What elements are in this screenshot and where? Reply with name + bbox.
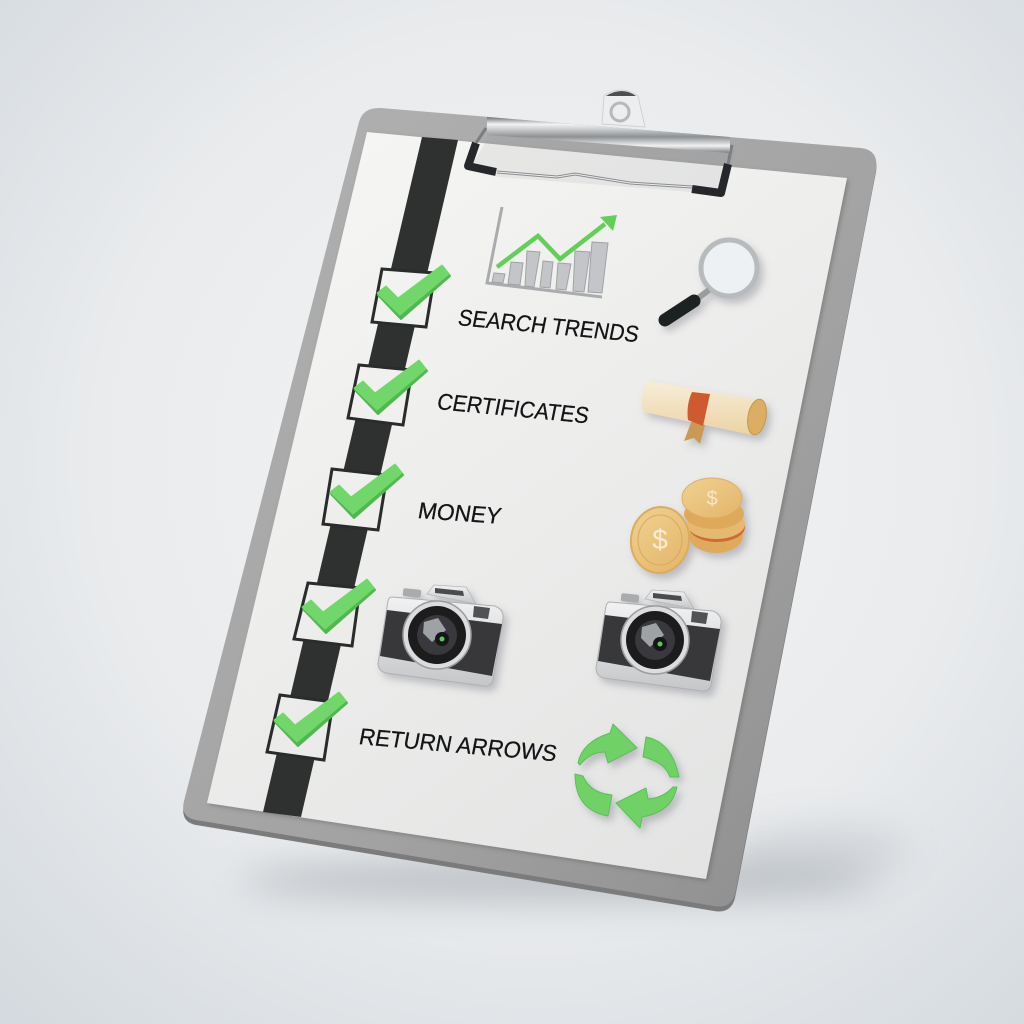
label: return arrows: RETURN ARROWS	[357, 723, 559, 766]
clip ring	[602, 90, 645, 127]
label: money: MONEY	[416, 497, 503, 529]
clip top bar	[487, 117, 730, 153]
row 1	[372, 265, 641, 347]
checkbox	[294, 583, 360, 646]
label: certificates: CERTIFICATES	[435, 388, 591, 428]
paper sheet	[207, 132, 847, 879]
checkbox	[267, 695, 333, 760]
icon: coins: $	[652, 524, 668, 555]
icon: camera right	[596, 590, 721, 691]
check mark	[330, 464, 403, 518]
icon: camera left	[378, 585, 503, 686]
check mark	[354, 360, 427, 414]
board shadow right	[730, 824, 910, 876]
ground shadow	[240, 858, 880, 902]
check mark	[274, 692, 347, 746]
row 5	[267, 692, 559, 766]
clip wire	[497, 172, 692, 187]
icon: trend chart	[487, 207, 617, 297]
icon: return arrows	[575, 724, 679, 828]
clip shadow	[468, 135, 735, 197]
row 4	[294, 579, 375, 646]
checkbox	[348, 365, 412, 425]
checkbox	[372, 269, 435, 327]
clip	[468, 90, 735, 197]
checkbox	[323, 469, 387, 530]
icon: coins	[627, 478, 745, 577]
row 2	[348, 360, 591, 428]
black strip	[263, 137, 458, 817]
label: search trends: SEARCH TRENDS	[456, 304, 641, 347]
clipboard board	[183, 108, 876, 911]
icon: magnifying glass	[665, 240, 757, 320]
check mark	[302, 579, 375, 633]
check mark	[377, 265, 450, 319]
icon: diploma scroll	[642, 381, 769, 444]
row 3	[323, 464, 503, 530]
icon: coins: $	[706, 488, 718, 510]
